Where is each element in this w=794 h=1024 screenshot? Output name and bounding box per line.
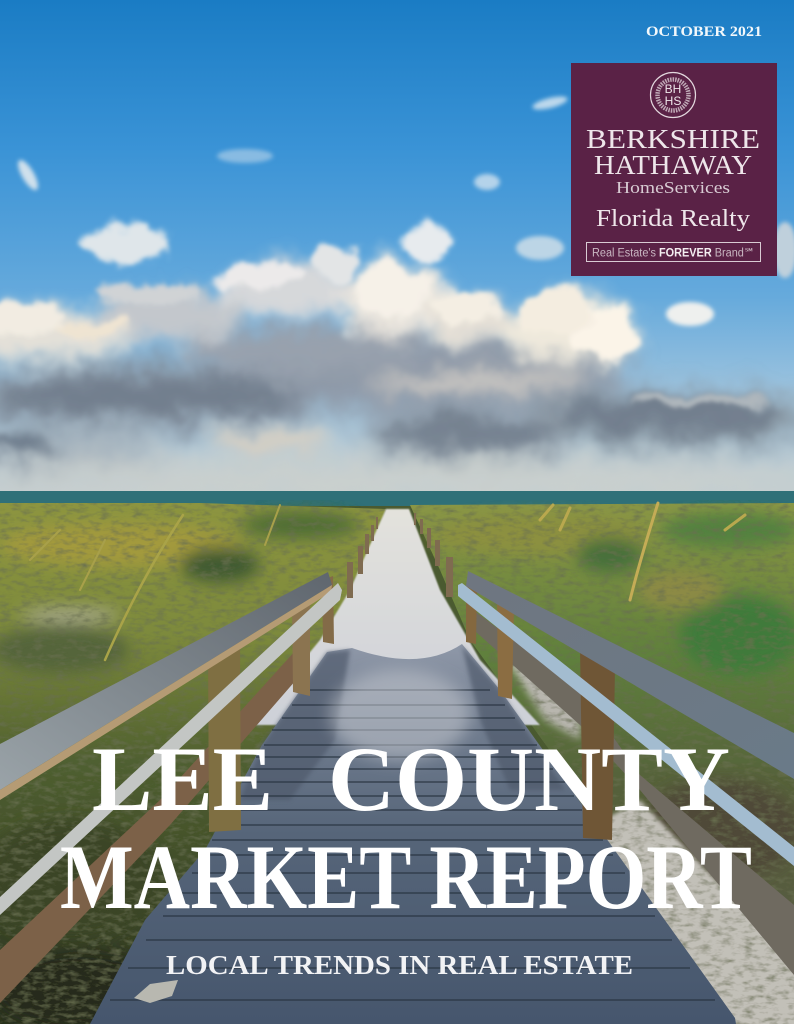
brand name: Florida Realty [596, 206, 750, 232]
near post [208, 640, 241, 832]
top rail edge [0, 585, 332, 800]
far posts [292, 596, 310, 696]
tagline box: Real Estate's FOREVER Brand℠ [592, 248, 755, 260]
brand name: BERKSHIRE [586, 124, 760, 154]
small wispy clouds [14, 94, 794, 326]
distant fence posts [414, 513, 453, 597]
right railing [414, 513, 794, 975]
silver handrail [458, 583, 794, 866]
far posts [466, 585, 477, 644]
lower wood rail [0, 650, 296, 1003]
icon: BHHS seal [650, 72, 696, 118]
sand banks [500, 650, 794, 1024]
worn patch [134, 980, 178, 1003]
top rail [0, 572, 332, 790]
sand path [250, 509, 540, 725]
icon: BHHS seal: BH [665, 82, 681, 96]
top rail [466, 571, 794, 779]
brand name: HomeServices [616, 178, 730, 197]
distant fence posts [347, 517, 378, 598]
deck planks [110, 690, 715, 1000]
right dunes [410, 503, 794, 1024]
date: OCTOBER 2021 [646, 24, 762, 40]
left railing [0, 517, 378, 1003]
near post [580, 648, 615, 840]
tagline box [586, 242, 760, 262]
lower wood rail [476, 612, 794, 975]
title: COUNTY [328, 728, 730, 830]
silver handrail [0, 583, 342, 915]
boardwalk [90, 644, 736, 1024]
brand name: HATHAWAY [594, 150, 752, 180]
icon: BHHS seal: HS [665, 94, 681, 108]
clouds [0, 225, 794, 494]
subtitle: LOCAL TRENDS IN REAL ESTATE [166, 950, 633, 980]
left dunes [0, 503, 386, 1024]
brand name [586, 124, 760, 232]
title: LEE [92, 728, 273, 830]
sea horizon [0, 491, 794, 506]
title [60, 728, 752, 928]
icon: sea oats [30, 503, 745, 660]
sky [0, 0, 794, 495]
logo panel [571, 63, 777, 276]
dunes [0, 503, 794, 1024]
shaded deck sides [240, 646, 565, 800]
